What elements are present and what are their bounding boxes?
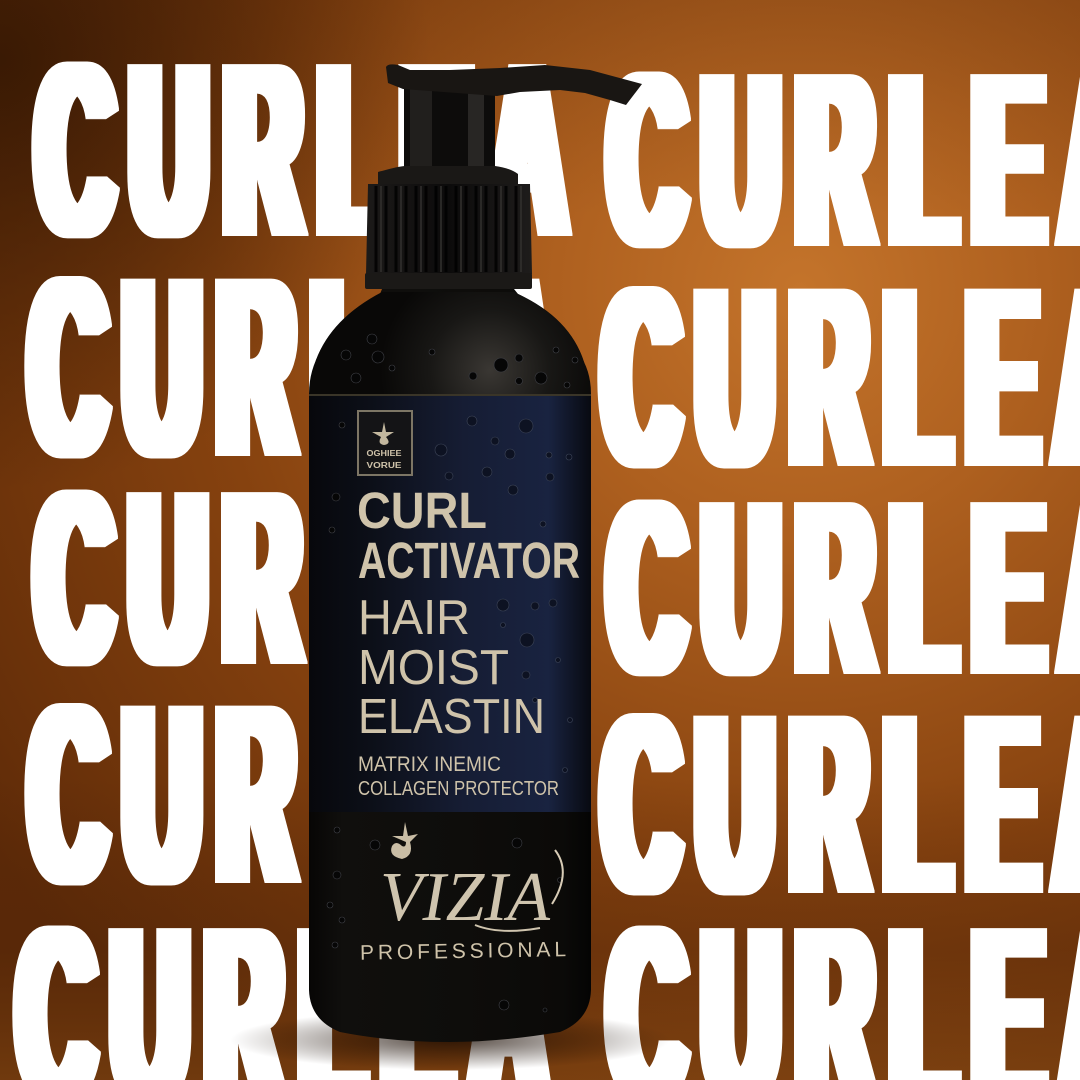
- label text: brand badge: VORUE: [366, 461, 402, 470]
- label text: product name: CURL: [357, 482, 487, 539]
- pump stem: [404, 85, 495, 170]
- repeated headline text: left column: [18, 12, 583, 1080]
- label text: product name: ELASTIN: [358, 690, 545, 744]
- label text: product name: HAIR: [358, 591, 470, 645]
- brand logo: VIZIA Professional: VIZIA: [380, 859, 550, 936]
- label text: product name: MOIST: [358, 641, 509, 695]
- brand logo: VIZIA Professional: PROFESSIONAL: [360, 938, 566, 965]
- navy label band: [309, 395, 591, 812]
- logo star ornament: [391, 822, 418, 859]
- label text: product name: [357, 482, 580, 800]
- shoulder highlight: [309, 292, 591, 394]
- repeated headline text: left column: CURLEA: [37, 12, 583, 288]
- water droplets: [327, 334, 578, 1012]
- bottle body: [309, 289, 591, 1042]
- label text: product name: COLLAGEN PROTECTOR: [358, 778, 559, 800]
- brand logo: VIZIA Professional: [360, 822, 566, 965]
- badge emblem: [372, 422, 394, 445]
- repeated headline text: left column: CURLEA: [30, 652, 576, 937]
- pump actuator: [386, 64, 642, 105]
- pump collar: [378, 166, 518, 184]
- product bottle: [309, 64, 642, 1042]
- label text: brand badge: OGHIEE: [366, 449, 402, 458]
- repeated headline text: right column: [603, 22, 1080, 1080]
- ribbed cap: [365, 184, 532, 289]
- label text: product name: MATRIX INEMIC: [358, 753, 501, 776]
- repeated headline text: left column: CURLEA: [30, 225, 576, 510]
- label text: brand badge: [358, 411, 412, 475]
- repeated headline text: left column: CURLEA: [36, 440, 582, 716]
- label text: product name: ACTIVATOR: [358, 532, 580, 589]
- floor shadow under bottle: [230, 1010, 670, 1070]
